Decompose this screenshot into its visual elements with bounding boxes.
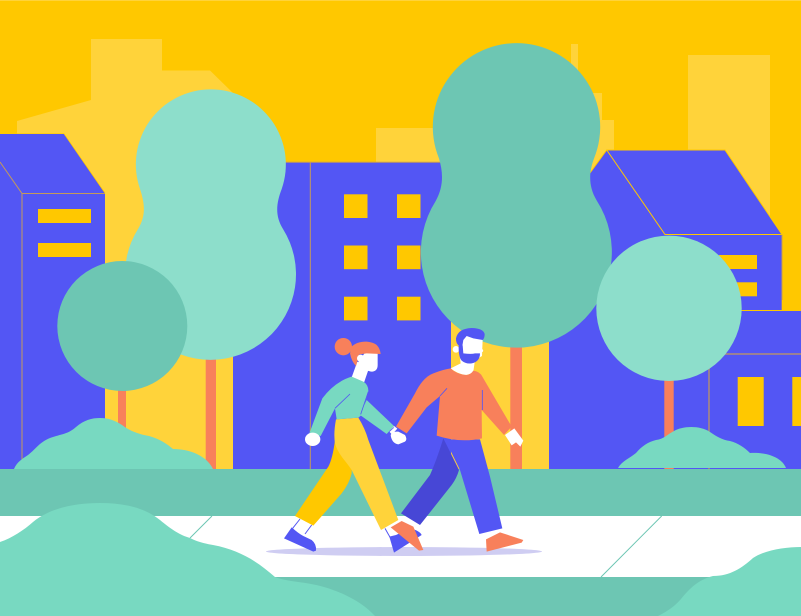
man front sock: [486, 529, 500, 539]
sidewalk: [0, 516, 801, 577]
bush: foreground left: [0, 503, 375, 616]
tree: small left tree: [57, 261, 187, 469]
figure: woman: [284, 338, 422, 553]
bush: foreground right: [658, 547, 801, 616]
light top edge: [0, 0, 801, 1]
man beard: [459, 345, 480, 364]
man front shoe: [486, 532, 523, 552]
tree: large light tree: [125, 89, 296, 469]
woman far arm: [360, 400, 394, 434]
man ears: [453, 346, 483, 353]
distant skyline: [17, 39, 770, 469]
woman front leg: [334, 418, 398, 530]
building: lower right block: [709, 300, 801, 469]
building: left house: [0, 134, 105, 469]
ground shadow: [266, 547, 542, 556]
woman face: [357, 353, 378, 372]
man front leg: [445, 439, 502, 534]
woman hair bun: [335, 338, 352, 355]
bush: back left: [14, 418, 213, 469]
bush: back right: [618, 427, 786, 468]
man face: [460, 335, 483, 363]
man back leg: [401, 438, 459, 525]
woman front foot: [385, 522, 422, 553]
man hair: [456, 328, 485, 346]
joined hands: [391, 432, 406, 444]
woman cuff: [389, 426, 397, 435]
woman back foot: [284, 519, 316, 552]
building: right house: [549, 150, 801, 469]
lower grass band: [0, 577, 801, 616]
woman ear: [357, 355, 364, 362]
grass band: [0, 469, 801, 516]
building: centre block: [233, 162, 451, 469]
figure: man: [391, 328, 523, 552]
woman neck: [352, 362, 368, 383]
man torso and arms: [396, 368, 512, 440]
woman hair: [350, 342, 381, 366]
tree: right light tree: [596, 236, 742, 469]
man neck: [451, 358, 475, 375]
woman hand: [305, 433, 320, 446]
man back shoe: [391, 521, 423, 551]
woman torso and near arm: [309, 377, 368, 436]
man far hand: [505, 428, 523, 447]
tree: large dark tree: [421, 43, 612, 469]
man back sock: [398, 517, 417, 530]
woman back leg: [295, 440, 352, 526]
